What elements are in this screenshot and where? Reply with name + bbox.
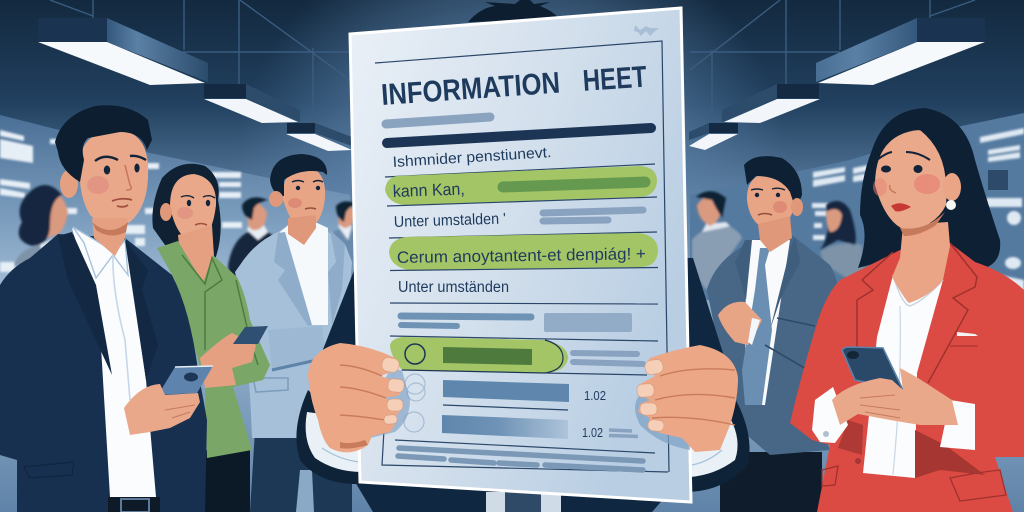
green row 1	[385, 166, 657, 205]
head	[875, 130, 948, 230]
row bars	[543, 210, 643, 221]
row text: line 2: Unter umstalden '	[394, 210, 506, 231]
person: man in navy suit with phone	[0, 105, 213, 512]
shirt	[72, 228, 156, 497]
left wall signs	[0, 130, 242, 272]
jacket	[0, 234, 207, 512]
sheet title: INFORMATION	[380, 67, 561, 112]
person: far left woman	[14, 185, 70, 272]
subtitle bar	[386, 117, 490, 124]
ceiling rods	[50, 0, 975, 123]
green row 2: Cerum anoytantent-et denpiág! +	[397, 245, 646, 267]
shirt	[863, 275, 943, 478]
belt	[108, 497, 160, 512]
person: center man behind sheet	[296, 0, 750, 512]
row bars and block	[401, 313, 632, 332]
data row 2: 1.02	[582, 425, 603, 440]
nails	[381, 356, 405, 425]
person: woman behind right	[820, 201, 865, 280]
hair	[55, 105, 152, 182]
jacket	[322, 255, 723, 512]
hands	[832, 368, 958, 425]
inner frame	[375, 41, 669, 472]
person: woman in green shirt	[152, 164, 270, 512]
lapel lines	[857, 243, 977, 383]
data row 1	[405, 374, 606, 403]
neck	[892, 222, 950, 303]
background people	[14, 185, 865, 290]
hand shadows	[362, 370, 410, 440]
pants	[855, 470, 923, 512]
hand	[124, 384, 200, 435]
green row 3	[390, 337, 568, 373]
head	[80, 130, 148, 226]
green row 1: kann Kan,	[392, 179, 465, 201]
person: man far behind	[323, 201, 364, 262]
light: right middle	[722, 84, 820, 123]
person: man in grey-blue suit	[235, 154, 352, 512]
light: right large	[816, 18, 985, 85]
person: man behind right	[692, 191, 742, 290]
hand: left holding sheet	[308, 343, 405, 452]
light: left middle	[204, 84, 300, 123]
row bars	[573, 353, 643, 364]
hair	[858, 108, 1000, 268]
right wall signs	[812, 128, 1024, 305]
cuffs	[812, 387, 848, 443]
lapels	[58, 232, 112, 375]
ceiling lights	[38, 18, 985, 151]
row text: line 1: Ishmnider penstiunevt.	[392, 144, 552, 171]
green row 2	[389, 233, 658, 270]
hand: right holding sheet	[637, 345, 738, 452]
decoration: stars	[634, 25, 659, 36]
phone	[842, 347, 903, 390]
footer bars	[398, 448, 643, 470]
person: man in slate suit	[707, 156, 840, 512]
shirt and tie	[486, 492, 561, 512]
sheet title: HEET	[582, 61, 648, 98]
nails	[637, 359, 664, 432]
light: right small	[689, 123, 738, 150]
person: woman in red blazer	[790, 108, 1024, 512]
row text: line 3: Unter umständen	[398, 279, 509, 296]
data row 2	[404, 412, 638, 440]
cuff	[112, 400, 131, 448]
person: man behind left	[228, 197, 285, 280]
heading rule	[387, 128, 651, 143]
phone	[158, 366, 213, 395]
light: left large	[38, 18, 208, 85]
light: left small	[286, 123, 352, 151]
data row 1: 1.02	[584, 388, 606, 403]
blazer	[790, 243, 1024, 512]
right sleeve	[680, 390, 750, 492]
information sheet	[350, 8, 691, 502]
left sleeve	[296, 390, 365, 484]
hair front	[872, 118, 950, 185]
hair top	[468, 0, 560, 22]
paper	[350, 8, 691, 502]
